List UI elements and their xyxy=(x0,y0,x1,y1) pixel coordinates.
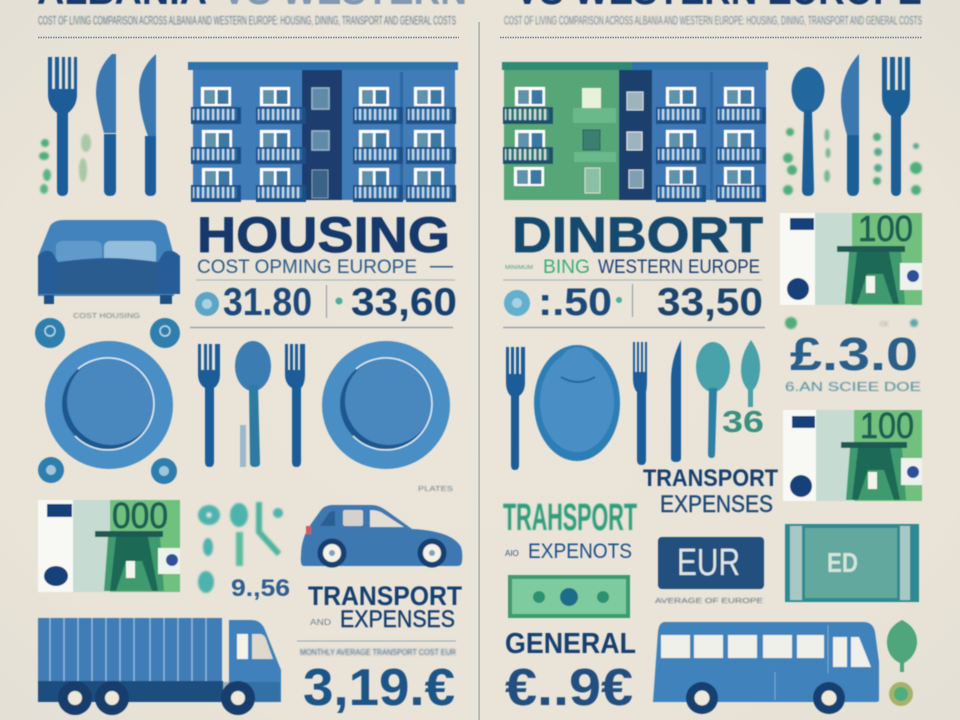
heading: dining: WESTERN EUROPE xyxy=(598,257,760,278)
heading: dining: DINBORT xyxy=(512,207,763,263)
heading: transport expenses, left: MONTHLY AVERAGE TRANSPORT COST EUR xyxy=(300,648,456,657)
heading: transport, green: TRAHSPORT xyxy=(503,497,637,539)
heading: transport expenses, centre right xyxy=(643,465,778,518)
icon: herbs beside cutlery xyxy=(39,134,91,194)
heading: dining xyxy=(503,207,763,280)
subheading: expenses: EXPENOTS xyxy=(528,540,632,563)
EUR label xyxy=(658,537,764,589)
icon: banknote upper right: 100 xyxy=(858,208,913,249)
price: 36: 36 xyxy=(722,404,764,439)
dotted rules under subtitle xyxy=(38,36,922,38)
heading: housing: COST OPMING EUROPE xyxy=(197,257,417,278)
icon: banknote upper right xyxy=(780,208,922,305)
heading: transport expenses, centre right: EXPENSES xyxy=(660,491,773,518)
subtitle lines: COST OF LIVING COMPARISON ACROSS ALBANIA AND WESTERN EUROPE: HOUSING, DINING, TRANSPORT AND GENERAL COSTS xyxy=(38,14,456,28)
small green accents above price: CE xyxy=(880,322,888,328)
dining prices xyxy=(503,281,765,328)
icon: right cutlery, spoon knife fork xyxy=(792,54,910,196)
centre divider xyxy=(478,22,480,720)
heading: transport expenses, left: EXPENSES xyxy=(340,606,455,633)
icon: herbs by right cutlery xyxy=(783,128,922,195)
subheading: expenses: AIO xyxy=(505,549,519,558)
tiny sofa caption: COST HOUSING xyxy=(73,311,140,320)
general price: €..9€ xyxy=(505,659,633,717)
EUR label: EUR xyxy=(677,542,740,584)
heading: transport expenses, centre right: TRANSPORT xyxy=(643,465,778,492)
tiny EUR caption: AVERAGE OF EUROPE xyxy=(655,598,763,605)
icon: apartment block, green and blue xyxy=(502,62,768,202)
icon: left cutlery set, fork and knives xyxy=(48,54,156,196)
housing prices: 33,60 xyxy=(351,281,457,324)
icon: left plate xyxy=(45,341,173,469)
icon: right plate xyxy=(322,341,450,469)
price: right side upper: £.3.0 xyxy=(790,328,918,380)
icon: top badges beside plate xyxy=(35,318,180,348)
icon: teal card: ED xyxy=(827,547,858,578)
dining prices: :.50 xyxy=(538,281,612,324)
icon: teal food scraps xyxy=(198,502,283,593)
title: Albania vs Western Europe xyxy=(37,0,922,13)
heading: transport expenses, left xyxy=(297,581,462,657)
caption under price: 6.AN SCIEE DOE xyxy=(785,379,921,394)
heading: housing xyxy=(196,207,455,280)
icon: green leaf and coin xyxy=(887,620,917,706)
icon: teal card xyxy=(785,524,919,602)
icon: banknote lower right xyxy=(783,405,922,501)
icon: centre cutlery, fork, spoon, fork xyxy=(198,341,305,467)
heading: transport expenses, left: AND xyxy=(310,618,331,627)
icon: banknote lower right: 100 xyxy=(860,405,914,446)
tiny plate caption: PLATES xyxy=(418,486,453,493)
price: food: 9.,56 xyxy=(231,575,290,602)
heading: transport expenses, left: TRANSPORT xyxy=(308,581,462,611)
heading: housing: HOUSING xyxy=(197,207,450,263)
housing prices: 31.80 xyxy=(223,281,312,324)
icon: sofa xyxy=(38,220,180,304)
icon: truck xyxy=(38,618,281,715)
heading: dining: BING xyxy=(543,257,590,278)
heading: general: GENERAL xyxy=(505,628,636,660)
icon: banknote left: 000 xyxy=(112,495,168,536)
icon: lower badges xyxy=(38,457,177,484)
icon: apartment block, blue xyxy=(188,62,458,202)
icon: right plate set xyxy=(506,340,760,470)
icon: bus xyxy=(653,622,879,714)
housing prices xyxy=(190,281,457,328)
icon: banknote left xyxy=(38,495,180,592)
icon: car xyxy=(301,505,462,568)
small green accents above price xyxy=(785,317,918,329)
heading: dining: MINIMUM xyxy=(505,265,533,271)
transport price: 3,19.€ xyxy=(303,659,455,717)
icon: green bill xyxy=(508,575,630,618)
dining prices: 33,50 xyxy=(657,281,763,324)
